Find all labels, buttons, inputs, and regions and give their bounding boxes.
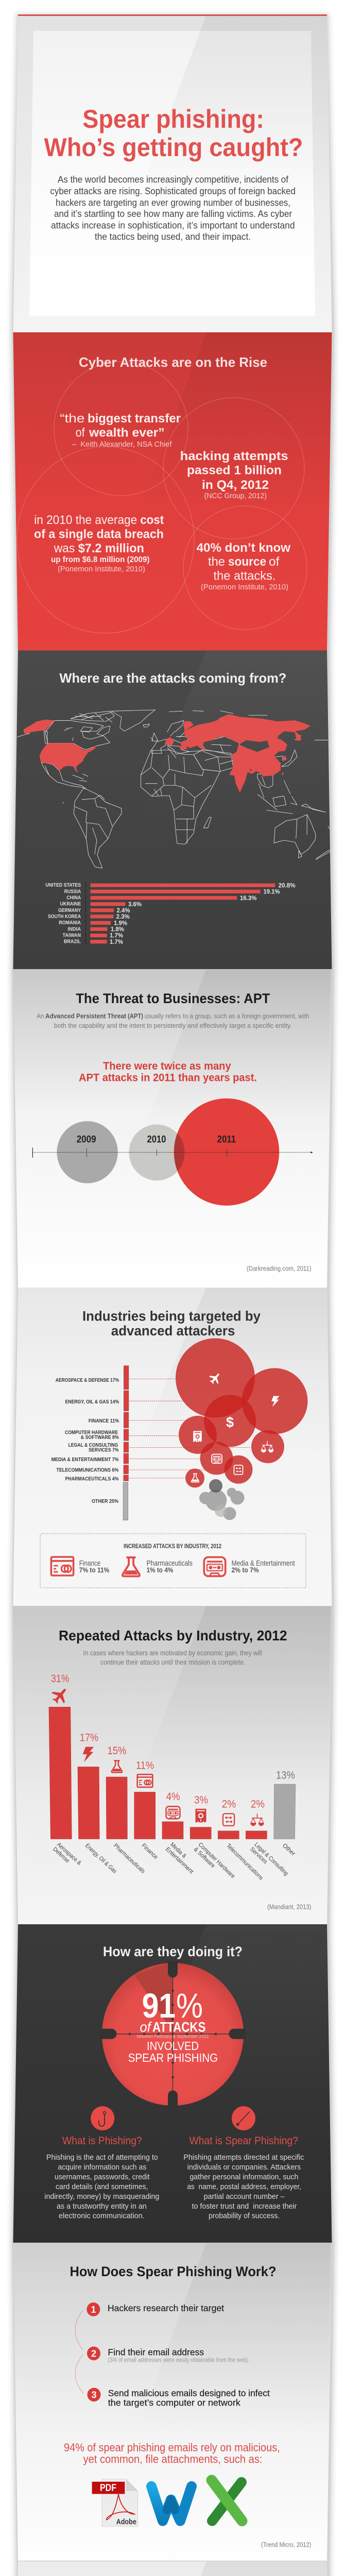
APT definition: (APT) [128,1012,143,1020]
step 3: the target’s computer or network [108,2398,240,2408]
APT statement: There were twice as many [103,1060,231,1072]
step 3: Send malicious emails designed to infect [108,2388,270,2398]
text block: what is spear phishing: probability of success. [209,2211,280,2221]
target graphic: 91 percent: 91 [142,1987,176,2025]
bar chart: repeated attacks: & Software [193,1846,216,1869]
bar chart: repeated attacks: 4% [166,1791,180,1803]
text block: what is spear phishing: to foster trust and increase their [192,2202,297,2211]
bar chart: attack sources: GERMANY [58,907,81,913]
dashed arrows [75,2311,83,2393]
callout: increased attacks by industry: Media & Entertainment [232,1560,295,1568]
text block: what is spear phishing: Phishing attempts directed at specific [183,2153,304,2162]
bar chart: attack sources: BRAZIL [64,939,81,945]
bar chart: repeated attacks: 11% [136,1760,154,1771]
bar chart: repeated attacks: 2% [222,1799,236,1810]
panel: where attacks come from [13,650,332,969]
callout: increased attacks by industry [40,1534,306,1588]
bar chart: attack sources [45,882,296,945]
intro text: hackers are targeting an ever growing number of businesses, [56,198,290,208]
step 1 [87,2302,224,2316]
title: Spear phishing: [82,105,264,133]
stat: biggest transfer: wealth ever” [89,426,165,440]
stat: hacking attempts: hacking attempts [180,449,288,463]
bar chart: repeated attacks: Services [249,1846,268,1865]
callout: increased attacks by industry: Finance [79,1560,100,1568]
step 2 [87,2347,249,2364]
bar chart: attack sources: RUSSIA [64,888,81,894]
industry labels: MEDIA & ENTERTAINMENT 7% [51,1456,119,1463]
bar chart: repeated attacks: 17% [80,1732,98,1743]
APT statement [79,1060,257,1084]
intro text: the tactics being used, and their impact. [95,232,251,242]
title [44,105,303,162]
target graphic: 91 percent [100,1961,246,2108]
bar chart: attack sources: 1.7% [110,932,123,939]
stat: source unknown: the [208,555,225,569]
industry labels: TELECOMMUNICATIONS 6% [56,1467,119,1473]
APT definition: An [37,1012,44,1020]
step 2: Find their email address [108,2347,204,2357]
industry labels: LEGAL & CONSULTING [68,1442,118,1448]
target graphic: 91 percent: ATTACKS [152,2020,205,2035]
callout: increased attacks by industry: INCREASED ATTACKS BY INDUSTRY, 2012 [124,1544,221,1550]
bar chart: attack sources: TAIWAN [63,933,81,939]
text block: what is spear phishing: individuals or companies. Attackers [187,2163,301,2172]
bar chart: attack sources: 1.9% [114,919,127,926]
title: Who’s getting caught? [44,133,303,162]
APT definition [37,1012,309,1029]
bar chart: attack sources: 2.4% [116,907,130,914]
bar chart: repeated attacks: 31% [51,1673,69,1685]
red top bar [18,14,327,16]
heading: APT: The Threat to Businesses: APT [76,991,270,1006]
callout: increased attacks by industry: Pharmaceuticals [147,1560,193,1568]
target graphic: 91 percent: SPEAR PHISHING [128,2051,218,2064]
panel: repeated attacks [13,1606,332,1924]
stat: data breach cost: of a single data breach [34,528,164,541]
stat: data breach cost: cost [140,513,164,527]
stat: biggest transfer: of [76,426,85,440]
stat: source unknown: the attacks. [213,569,276,583]
stat: biggest transfer: – Keith Alexander, NSA Chief [72,440,173,449]
bar chart: attack sources: UKRAINE [60,901,81,907]
APT definition: both the capability and the intent to persistently and effectively target a specific entity. [54,1022,291,1029]
bar chart: repeated attacks: Legal & Consulting [253,1842,289,1877]
industry bubbles: $ [226,1414,234,1430]
bar chart: attack sources: SOUTH KOREA [48,913,81,920]
stat: hacking attempts: passed 1 billion [187,464,282,477]
bar chart: attack sources: 19.1% [264,888,280,895]
icon: PDF file: PDF [100,2483,116,2494]
callout: increased attacks by industry: 2% to 7% [232,1566,259,1574]
icon: PDF file: Adobe [116,2518,136,2527]
source: Mandiant: (Mandiant, 2013) [267,1903,311,1911]
step 3: 3 [92,2389,97,2400]
bar chart: attack sources: INDIA [67,926,81,932]
bar chart: repeated attacks: 13% [276,1769,295,1782]
stat: source unknown: (Ponemon Institute, 2010) [201,583,288,591]
industry labels: ENERGY, OIL & GAS 14% [65,1399,119,1405]
bubble timeline [32,1098,313,1206]
stat: biggest transfer [60,412,181,449]
panel: how spear phishing works [13,2243,332,2561]
panel: industries targeted [13,1287,332,1606]
source: Darkreading: (Darkreading.com, 2011) [247,1264,312,1273]
bar chart: repeated attacks: Defense [51,1846,71,1864]
statement: 94 percent: 94% of spear phishing emails rely on malicious, [64,2441,280,2454]
source: Trend Micro: (Trend Micro, 2012) [261,2540,311,2548]
heading: repeated attacks: Repeated Attacks by Industry, 2012 [59,1628,287,1643]
bar chart: repeated attacks: Telecommunications [225,1843,264,1882]
bar chart: repeated attacks: 2% [251,1799,265,1810]
panel: it's effective [13,2561,332,2576]
text block: what is phishing: usernames, passwords, credit [55,2173,150,2181]
stat: biggest transfer: “the [60,412,84,426]
text block: what is phishing: indirectly, money) by masquerading [44,2192,159,2201]
bar chart: repeated attacks: Computer Hardware [197,1842,236,1879]
heading: work: How Does Spear Phishing Work? [70,2264,276,2279]
bar chart: repeated attacks: Pharmaceuticals [112,1842,146,1875]
intro text: and it’s startling to see how many are falling victims. As cyber [54,209,292,219]
step 1: 1 [91,2304,96,2315]
heading: where: Where are the attacks coming from? [59,670,286,686]
text block: what is phishing [44,2135,159,2221]
industry labels: AEROSPACE & DEFENSE 17% [56,1377,119,1383]
panel: threat to businesses APT [13,969,332,1287]
bar chart: repeated attacks [49,1673,297,1882]
stat: biggest transfer: biggest transfer [88,412,181,426]
icon: Excel X [212,2480,242,2521]
APT definition: Advanced Persistent Threat [45,1012,127,1020]
intro text: As the world becomes increasingly competitive, incidents of [58,175,289,185]
industry bubbles [129,1338,308,1520]
stat: hacking attempts: in Q4, 2012 [202,478,269,492]
bar chart: repeated attacks: Entertainment [164,1846,195,1875]
industry labels [51,1377,119,1504]
industry labels: FINANCE 11% [89,1418,119,1424]
target graphic: 91 percent: % [176,1987,203,2025]
heading: industries [82,1309,261,1338]
stat: data breach cost: $7.2 million [78,541,144,555]
bar chart: repeated attacks: 3% [194,1794,208,1806]
heading: industries: advanced attackers [111,1323,235,1338]
stat: hacking attempts: (NCC Group, 2012) [204,492,267,500]
stat: source unknown: source [228,555,266,569]
bar chart: attack sources: ROMANIA [59,920,81,926]
step 3 [88,2388,270,2408]
stat: source unknown [197,541,290,591]
bubble timeline: 2011 [217,1134,236,1145]
stat: hacking attempts [180,449,288,500]
industry labels: PHARMACEUTICALS 4% [65,1476,119,1482]
bubble timeline: 2010 [147,1134,166,1145]
dotted circles [17,362,307,633]
stat: data breach cost: up from $6.8 million (2009) [51,555,149,564]
icon: PDF file [92,2479,138,2527]
repeated attacks intro [83,1649,262,1666]
text block: what is spear phishing: as name, postal address, employer, [187,2182,301,2191]
bar chart: attack sources: UNITED STATES [45,882,81,888]
bar chart: attack sources: 16.3% [240,894,257,902]
stat: source unknown: of [269,555,280,569]
target graphic: 91 percent: between February & September 2012 [137,2034,209,2040]
bar chart: attack sources: 20.8% [279,882,296,889]
bar chart: repeated attacks: Other [281,1842,297,1857]
callout: increased attacks by industry: 7% to 11% [79,1566,110,1574]
industry labels: OTHER 25% [92,1498,119,1504]
bar chart: repeated attacks: 15% [107,1745,126,1757]
text block: what is phishing: What is Phishing? [62,2135,142,2147]
panel: how are they doing it [13,1924,332,2243]
industry labels: SERVICES 7% [89,1447,119,1453]
bar chart: repeated attacks: Finance [141,1842,159,1860]
stat: data breach cost [34,513,164,573]
text block: what is phishing: as a trustworthy entity in an [57,2202,147,2211]
stat: data breach cost: in 2010 the average [34,513,137,527]
bubble timeline: 2009 [77,1134,96,1145]
bar chart: attack sources: CHINA [66,894,81,901]
intro text [50,175,296,242]
text block: what is spear phishing: partial account number – [204,2192,285,2201]
APT definition: usually refers to a group, such as a foreign government, with [145,1012,309,1020]
panel: intro [13,14,332,332]
bar chart: repeated attacks: Aerospace & [56,1841,82,1867]
APT statement: APT attacks in 2011 than years past. [79,1072,257,1084]
stat: source unknown: 40% don’t know [197,541,290,555]
step 1: Hackers research their target [108,2303,224,2313]
text block: what is spear phishing [183,2135,304,2221]
repeated attacks intro: In cases where hackers are motivated by economic gain, they will [83,1649,262,1657]
bar chart: repeated attacks: Energy, Oil & Gas [84,1842,118,1875]
bar chart: attack sources: 2.3% [116,913,130,920]
icon: Word W [151,2486,192,2521]
heading: industries: Industries being targeted by [82,1309,261,1324]
stat: data breach cost: was [54,541,75,555]
industry labels: COMPUTER HARDWARE [65,1430,118,1436]
heading: how: How are they doing it? [103,1944,243,1959]
stacked bar [123,1366,129,1520]
callout: increased attacks by industry: 1% to 4% [147,1566,174,1574]
text block: what is phishing: Phishing is the act of attempting to [46,2153,158,2162]
step 2: (3/4 of email addresses were easily obtainable from the web). [108,2358,249,2364]
text block: what is phishing: electronic communication. [59,2211,145,2221]
bar chart: attack sources: 1.8% [111,925,124,933]
bar chart: attack sources: 3.6% [128,901,142,908]
world map [17,710,330,868]
industry labels: & SOFTWARE 8% [81,1434,119,1440]
text block: what is spear phishing: What is Spear Phishing? [189,2135,298,2147]
intro text: attacks increase in sophistication, it’s important to understand [51,221,295,231]
heading: cyber attacks: Cyber Attacks are on the Rise [79,354,267,370]
target graphic: 91 percent: of [140,2020,152,2035]
intro text: cyber attacks are rising. Sophisticated groups of foreign backed [50,186,296,196]
statement: 94 percent [64,2441,280,2465]
text block: what is phishing: card details (and sometimes, [56,2182,148,2191]
text block: what is phishing: acquire information such as [58,2163,146,2172]
stat: data breach cost: (Ponemon Institute, 2010) [58,565,145,573]
bar chart: repeated attacks: Media & [169,1841,187,1859]
icon: fish hook [91,2106,114,2130]
panel: cyber attacks on the rise [13,332,332,650]
icon: spear [232,2106,255,2130]
bar chart: attack sources: 1.7% [110,938,123,945]
text block: what is spear phishing: gather personal information, such [189,2173,298,2181]
statement: 94 percent: yet common, file attachments, such as: [83,2452,263,2465]
target graphic: 91 percent: INVOLVED [147,2039,199,2053]
step 2: 2 [91,2348,96,2359]
repeated attacks intro: continue their attacks until their mission is complete. [100,1658,245,1666]
